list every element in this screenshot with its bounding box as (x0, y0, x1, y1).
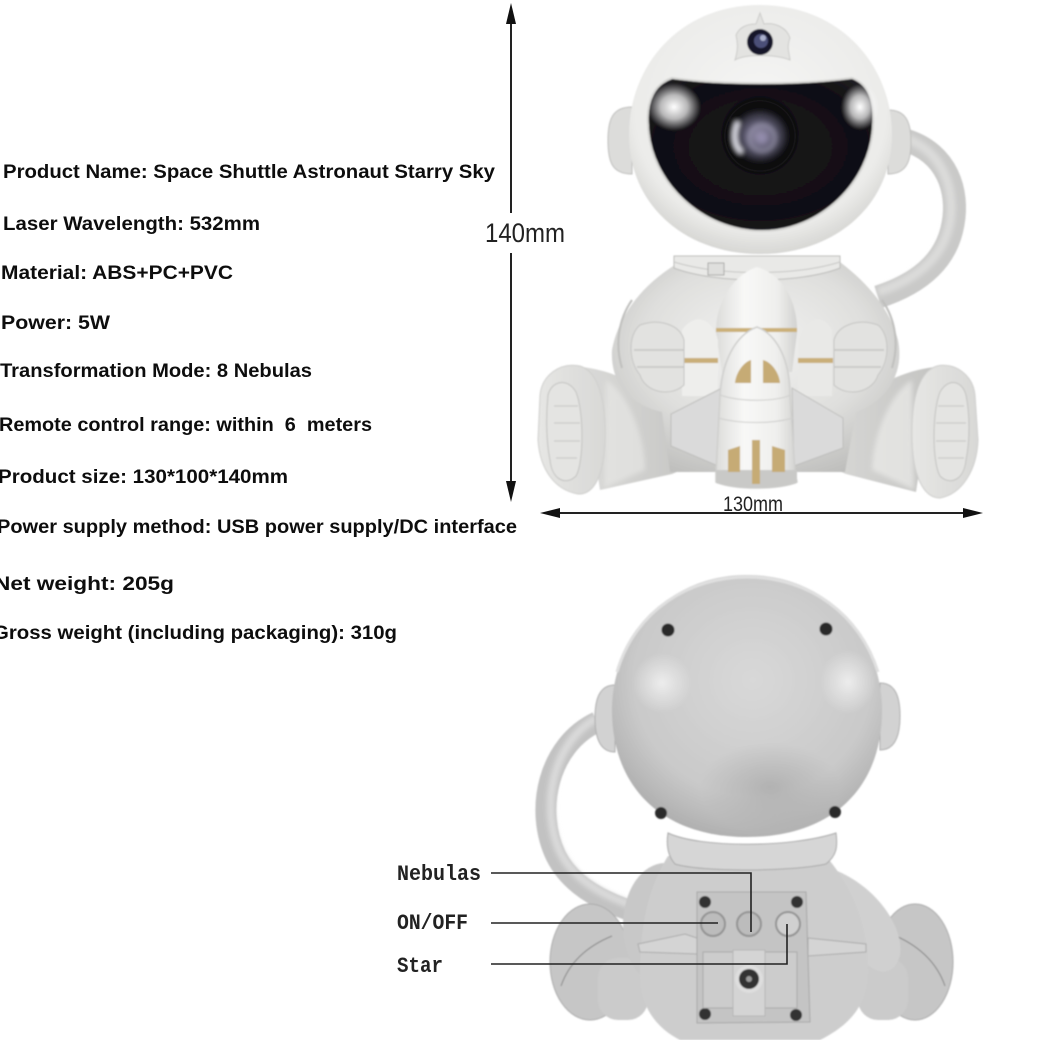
rear left foot (550, 904, 648, 1020)
helmet (629, 5, 892, 254)
callout: Star (397, 924, 787, 979)
shuttle gold engines (728, 440, 785, 484)
hose (878, 138, 955, 297)
callout: Nebulas: Nebulas (397, 862, 481, 887)
top camera badge (735, 13, 790, 60)
spec: transformation mode: Transformation Mode: 8 Nebulas (0, 361, 312, 382)
rear right foot (858, 904, 953, 1020)
height dimension arrow with 140mm label (485, 3, 565, 502)
projector lens (724, 100, 796, 172)
rear arms (623, 863, 900, 987)
rear helmet screws (655, 622, 841, 819)
spec: material: Material: ABS+PC+PVC (1, 263, 233, 284)
spec: remote control range: Remote control range: within 6 meters (0, 415, 372, 436)
panel buttons (701, 912, 800, 936)
callout: ON/OFF: ON/OFF (397, 911, 468, 936)
visor reflections (647, 83, 879, 131)
rear collar (667, 833, 837, 870)
strap sides (638, 934, 866, 956)
collar (674, 256, 840, 280)
shuttle wings (671, 388, 843, 466)
width dimension label: 130mm (723, 493, 783, 516)
rear ear right (880, 683, 900, 750)
front view astronaut product photo (538, 5, 978, 498)
left leg and foot (538, 365, 700, 494)
rear helmet (612, 575, 882, 837)
right hand (834, 322, 887, 392)
shuttle body (716, 327, 797, 488)
callout: Nebulas (397, 862, 751, 932)
spec: power: Power: 5W (1, 313, 110, 334)
specification list (0, 162, 517, 644)
torso (612, 262, 899, 472)
left hand (631, 322, 684, 392)
shuttle seams and base (716, 395, 797, 488)
chest panels and gold stripes (682, 319, 833, 396)
hose rear (546, 718, 700, 925)
right leg and foot (818, 365, 978, 498)
spec: product name: Product Name: Space Shuttle Astronaut Starry Sky (3, 162, 495, 183)
helmet ear right (888, 110, 911, 174)
height dimension arrow with 140mm label: 140mm (485, 218, 565, 248)
visor (648, 78, 873, 231)
arm folds (618, 300, 896, 368)
callout: Star: Star (397, 954, 443, 979)
control panel (697, 892, 810, 1023)
rocket upper body (716, 267, 797, 372)
panel screws (699, 896, 803, 1021)
rear torso (640, 856, 868, 1040)
spec: gross weight: Gross weight (including packaging): 310g (0, 623, 397, 644)
helmet ear left (608, 107, 632, 174)
spec: laser wavelength: Laser Wavelength: 532mm (3, 214, 260, 235)
shuttle gold windows (735, 360, 780, 383)
width dimension arrow (540, 508, 983, 518)
spec: product size: Product size: 130*100*140mm (0, 467, 288, 488)
rear view astronaut product photo (546, 575, 953, 1040)
DC port housing (703, 950, 797, 1016)
rear ear left (595, 685, 615, 752)
spec: power supply method: Power supply method: USB power supply/DC interface (0, 517, 517, 538)
